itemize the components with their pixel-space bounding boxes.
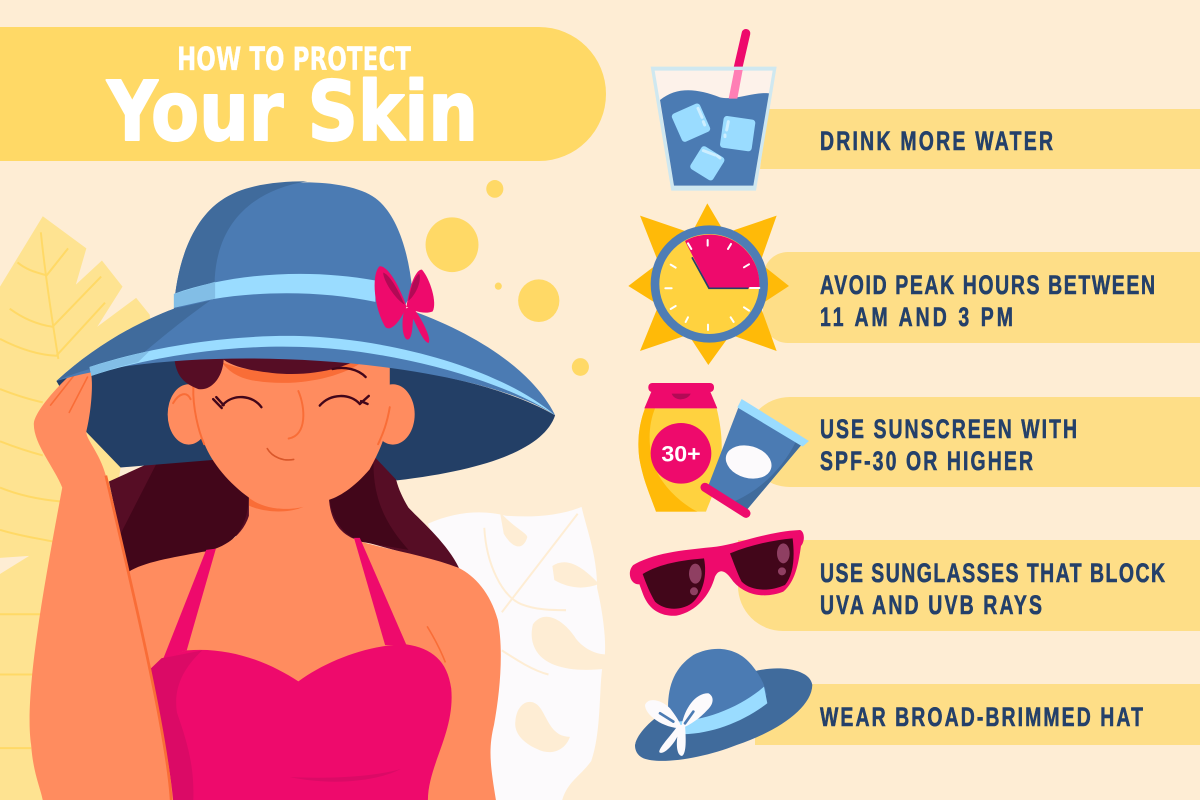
brim (635, 668, 812, 761)
hat brim underside (56, 356, 555, 480)
woman (30, 349, 555, 800)
hair back (109, 351, 459, 572)
fringe (174, 349, 375, 389)
ice highlights (698, 108, 728, 158)
face (193, 351, 390, 507)
brim ribbon (89, 336, 555, 415)
label: peak hours line 1: AVOID PEAK HOURS BETWEEN (820, 270, 1155, 300)
straw (729, 33, 746, 100)
crown (668, 649, 767, 733)
lens glints (689, 543, 790, 595)
icon: sunglasses (630, 530, 804, 616)
sun dots (426, 180, 589, 376)
bottle (638, 383, 722, 512)
white leaf (428, 507, 607, 800)
smile (267, 449, 294, 460)
label: hat: WEAR BROAD-BRIMMED HAT (820, 702, 1144, 732)
face outlines (173, 387, 390, 444)
label: sunglasses line 2: UVA AND UVB RAYS (820, 590, 1042, 620)
arm and hand (30, 364, 173, 800)
label: peak hours line 2: 11 AM AND 3 PM (820, 302, 1013, 332)
row bands (738, 109, 1200, 745)
icon: sun clock (628, 203, 789, 365)
water (660, 90, 769, 186)
title small line: HOW TO PROTECT (177, 40, 411, 78)
30+ badge: 30+ (661, 442, 701, 467)
woman illustration group with leaves and dots (0, 180, 607, 800)
label: sunscreen line 2: SPF-30 OR HIGHER (820, 446, 1033, 476)
neck shadow (249, 498, 303, 511)
ribbon (677, 687, 767, 734)
label: sunglasses line 1: USE SUNGLASSES THAT BLOCK (820, 558, 1165, 588)
title large line: Your Skin (106, 65, 478, 160)
tube (705, 399, 809, 513)
bow creases (660, 712, 693, 723)
clock hands (692, 257, 748, 288)
swimsuit (151, 538, 452, 800)
white bow (645, 693, 713, 756)
armpit fold (427, 626, 445, 662)
eyes, brow and mouth (213, 368, 369, 408)
peak hours sector (685, 235, 759, 288)
lenses (643, 538, 794, 609)
hat crown (174, 182, 412, 339)
crown ribbon (174, 274, 375, 308)
icon: small hat (635, 649, 812, 761)
icon: sunscreen (638, 383, 809, 513)
hat brim top (56, 291, 555, 415)
row labels (820, 126, 1165, 732)
icon: glass of water (651, 33, 777, 191)
label: drink water: DRINK MORE WATER (820, 126, 1053, 156)
large sun hat (56, 181, 555, 415)
yellow leaf (0, 216, 156, 800)
label: sunscreen line 1: USE SUNSCREEN WITH (820, 414, 1077, 444)
ears (168, 384, 415, 445)
frame (630, 530, 804, 616)
sun rays (628, 203, 789, 365)
title banner (0, 27, 606, 161)
clock ticks (665, 240, 759, 330)
torso (128, 492, 501, 800)
forehead shadow (222, 351, 375, 383)
glass (651, 67, 777, 191)
30+ badge (651, 423, 711, 484)
clock body (655, 230, 764, 338)
bow (375, 266, 434, 343)
ice cubes (671, 102, 756, 182)
